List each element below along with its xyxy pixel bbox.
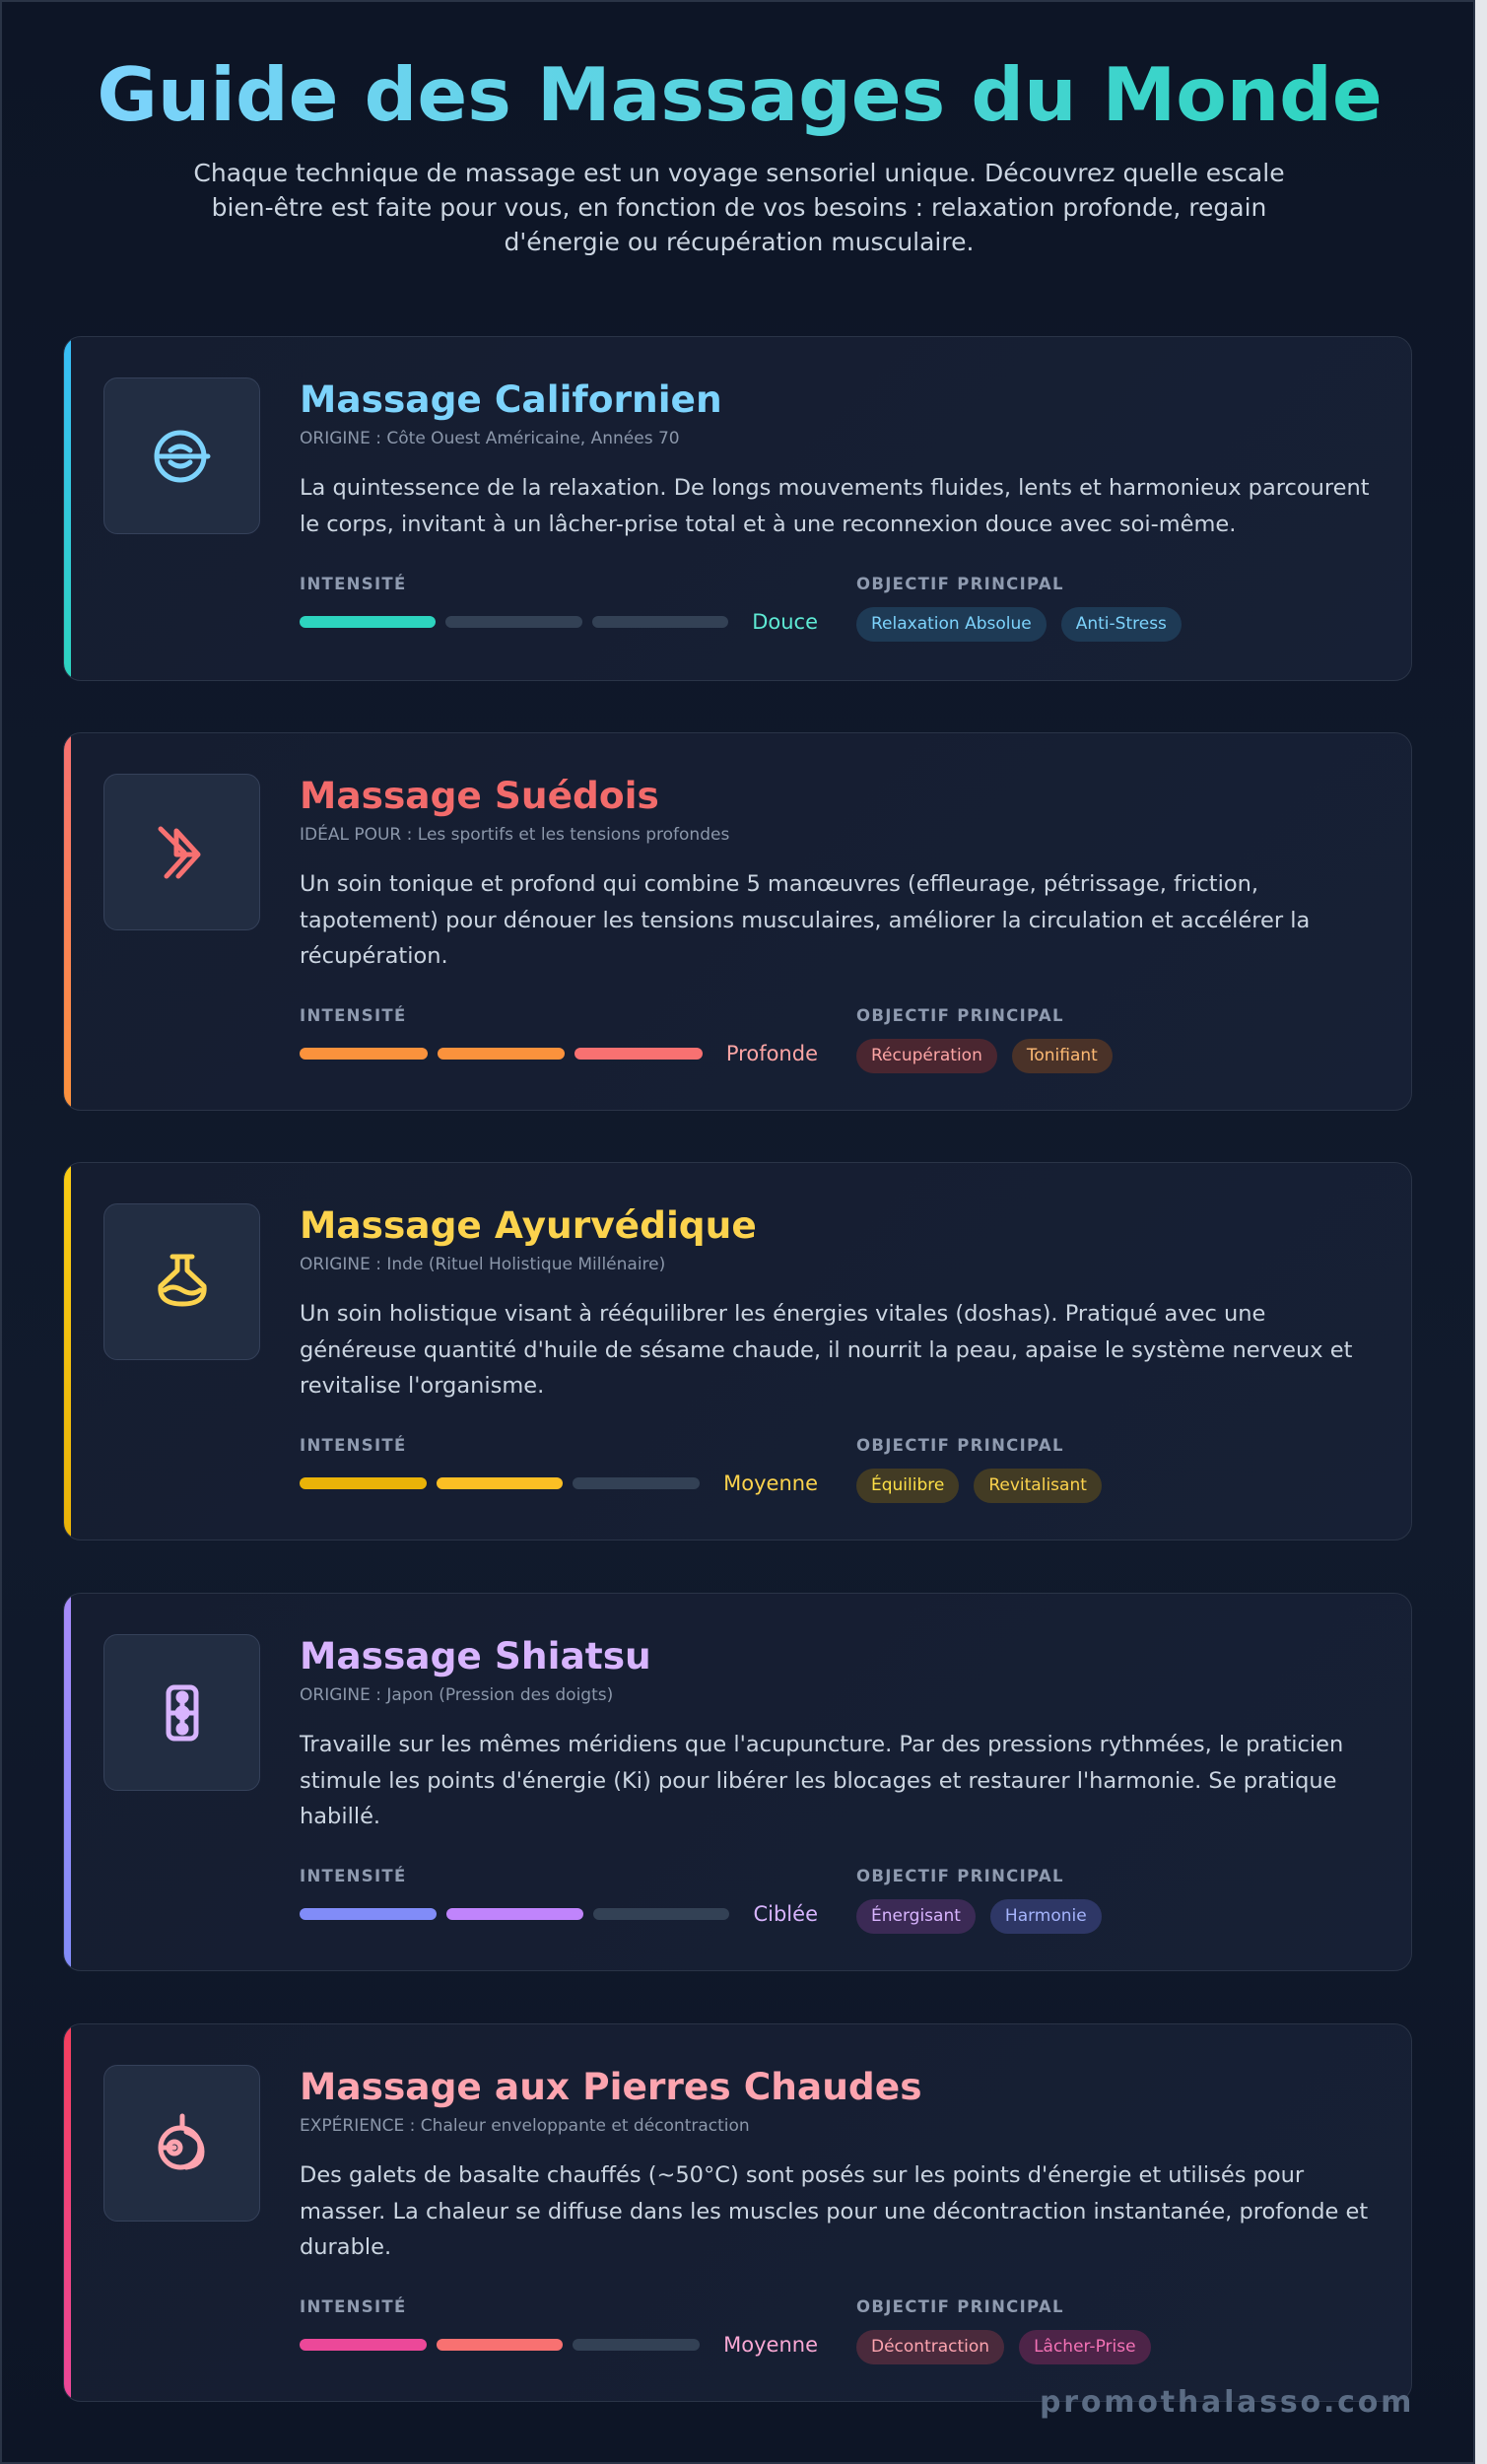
icon: pierres chaudes (103, 2065, 260, 2222)
heading: Massage Shiatsu (300, 1634, 651, 1677)
objective label: OBJECTIF PRINCIPAL (856, 1436, 1064, 1455)
tags (856, 1469, 1102, 1503)
origin: ORIGINE : Inde (Rituel Holistique Millénaire) (300, 1255, 665, 1274)
card: Massage Californien (63, 336, 1412, 681)
tags: Revitalisant (988, 1475, 1087, 1495)
tags (856, 1899, 1102, 1934)
intensity label: INTENSITÉ (300, 1436, 407, 1455)
intensity bars: Moyenne (723, 2333, 818, 2357)
intensity bars: Moyenne (723, 1472, 818, 1495)
heading: Massage Californien (300, 377, 722, 421)
tags: Anti-Stress (1076, 614, 1167, 634)
intensity bars (300, 610, 818, 634)
experience: EXPÉRIENCE : Chaleur enveloppante et décontraction (300, 2116, 750, 2136)
origin: ORIGINE : Japon (Pression des doigts) (300, 1685, 613, 1705)
intensity bars: Douce (752, 610, 818, 634)
watermark: promothalasso.com (1040, 2385, 1414, 2420)
description: Un soin tonique et profond qui combine 5 manœuvres (effleurage, pétrissage, friction, tapotement) pour dénouer les tensions musculaires, améliorer la circulation et accélérer la récupération. (300, 871, 1310, 969)
origin: ORIGINE : Côte Ouest Américaine, Années 70 (300, 429, 680, 448)
intensity label: INTENSITÉ (300, 1006, 407, 1025)
icon: californien (103, 377, 260, 534)
description: Des galets de basalte chauffés (~50°C) sont posés sur les points d'énergie et utilisés pour masser. La chaleur se diffuse dans les muscles pour une décontraction instantanée, profonde et durable. (300, 2162, 1368, 2260)
description: La quintessence de la relaxation. De longs mouvements fluides, lents et harmonieux parcourent le corps, invitant à un lâcher-prise total et à une reconnexion douce avec soi-même. (300, 475, 1370, 536)
ideal for: IDÉAL POUR : Les sportifs et les tensions profondes (300, 825, 729, 845)
card: Massage Ayurvédique (63, 1162, 1412, 1540)
tags: Tonifiant (1027, 1046, 1098, 1065)
tags: Harmonie (1005, 1906, 1087, 1926)
tags: Relaxation Absolue (871, 614, 1032, 634)
intensity bars (300, 2333, 818, 2357)
tags: Récupération (871, 1046, 982, 1065)
intensity label: INTENSITÉ (300, 1867, 407, 1885)
card: Massage aux Pierres Chaudes (63, 2023, 1412, 2402)
intensity label: INTENSITÉ (300, 2297, 407, 2316)
tags (856, 2330, 1151, 2364)
intensity bars (300, 1472, 818, 1495)
description: Un soin holistique visant à rééquilibrer les énergies vitales (doshas). Pratiqué avec une généreuse quantité d'huile de sésame chaude, il nourrit la peau, apaise le système nerveux et revitalise l'organisme. (300, 1301, 1352, 1399)
title: Guide des Massages du Monde (97, 51, 1383, 138)
tags (856, 607, 1182, 642)
card: Massage Shiatsu (63, 1593, 1412, 1971)
card: Massage Suédois (63, 732, 1412, 1111)
objective label: OBJECTIF PRINCIPAL (856, 1867, 1064, 1885)
objective label: OBJECTIF PRINCIPAL (856, 2297, 1064, 2316)
tags (856, 1039, 1113, 1073)
tags: Équilibre (871, 1475, 944, 1495)
objective label: OBJECTIF PRINCIPAL (856, 1006, 1064, 1025)
icon: ayurvedique (103, 1203, 260, 1360)
subtitle: Chaque technique de massage est un voyage sensoriel unique. Découvrez quelle escale bien-être est faite pour vous, en fonction de vos besoins : relaxation profonde, regain d'énergie ou récupération musculaire. (193, 159, 1285, 256)
tags: Lâcher-Prise (1034, 2337, 1136, 2357)
heading: Massage aux Pierres Chaudes (300, 2065, 922, 2108)
objective label: OBJECTIF PRINCIPAL (856, 575, 1064, 593)
description: Travaille sur les mêmes méridiens que l'acupuncture. Par des pressions rythmées, le praticien stimule les points d'énergie (Ki) pour libérer les blocages et restaurer l'harmonie. Se pratique habillé. (300, 1732, 1343, 1829)
tags: Énergisant (871, 1906, 961, 1926)
intensity label: INTENSITÉ (300, 575, 407, 593)
tags: Décontraction (871, 2337, 989, 2357)
icon: suedois (103, 774, 260, 930)
intensity bars (300, 1042, 818, 1065)
heading: Massage Suédois (300, 774, 659, 817)
intensity bars: Profonde (726, 1042, 818, 1065)
intensity bars (300, 1902, 818, 1926)
heading: Massage Ayurvédique (300, 1203, 757, 1247)
icon: shiatsu (103, 1634, 260, 1791)
intensity bars: Ciblée (753, 1902, 818, 1926)
